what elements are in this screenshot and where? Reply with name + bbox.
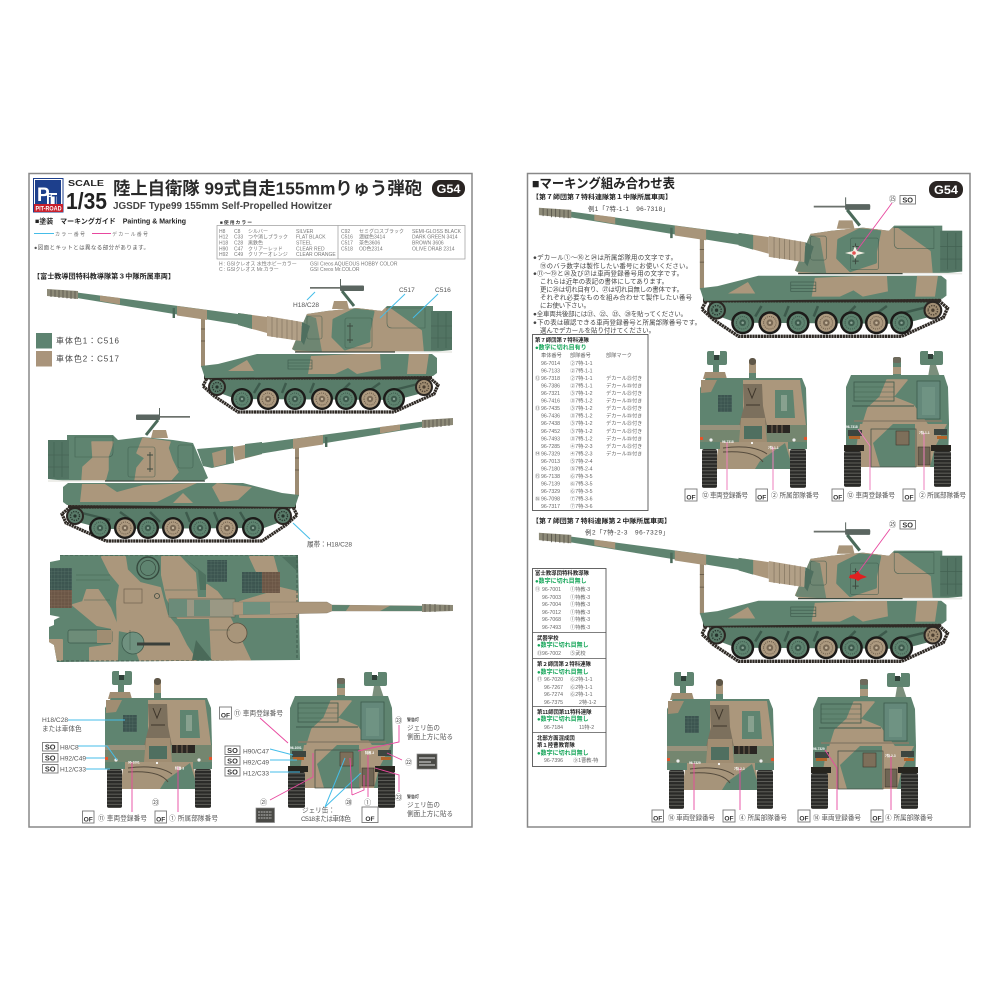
colour table: GSI Creos Mr.COLOR [310,267,360,273]
heading: painting and marking: ■塗装 マーキングガイド Painting & Marking [35,216,186,226]
table: 7th artillery regiment: ④7特-2-3 [570,442,593,450]
table: other units: 2特-1-2 [579,698,596,706]
table: other units: ⑪ [535,585,540,593]
logo: PIT-ROAD: P [37,185,50,206]
table: 7th artillery regiment: 96-7435 [541,406,560,412]
labels: example 2 views: 96-7329 [689,761,701,765]
table: 7th artillery regiment: ●数字に切れ目有り [535,344,587,352]
table: other units: 96-7068 [542,617,561,623]
labels: rear view: ① [364,798,371,807]
table: 7th artillery regiment: 96-7321 [541,391,560,397]
table: 7th artillery regiment: 96-7386 [541,384,560,390]
callout: SO marking example 2 [849,520,916,581]
colour table: C8 [234,229,241,235]
colour table: H92 [219,252,228,258]
colour table: STEEL [296,240,312,246]
table: other units: ⑬ [537,649,542,657]
colour table: つや消しブラック [248,234,288,241]
table: other units: 96-7002 [542,651,561,657]
notes: ⑲のバラ数字は製作したい番号にお使いください。 [540,261,692,270]
legend: line colours [34,231,148,238]
table: 7th artillery regiment: 96-7416 [541,399,560,405]
labels: rear view: 特教-3 [365,750,374,755]
table: other units: ●数字に切れ目無し [537,715,589,723]
colour table: C516 [341,235,353,241]
labels: example 1 views: OF [833,494,842,502]
colour table: C49 [234,252,243,258]
table: other units: 第１陸曹教育隊 [537,741,575,749]
labels: example 2 views: ⑭ 車両登録番号 [668,813,715,822]
table: 7th artillery regiment: ②7特-1-1 [570,366,593,374]
labels: rear view: ジェリ缶： [302,806,335,814]
table: other units: ●数字に切れ目無し [535,577,587,585]
badge: G54 [929,181,963,198]
table: 7th artillery regiment: 96-7317 [541,504,560,510]
colour table: 茶色3606 [359,240,380,246]
table: other units: ⑥2特-1-1 [570,683,593,691]
labels: rear view: OF [221,712,230,720]
labels: example 2 views: ④ 所属部隊番号 [885,813,933,822]
labels: example 1 views: 96-7318 [846,425,858,429]
callout: SO marking example 2: ㉕ [889,520,896,529]
colour table: OLIVE DRAB 2314 [412,246,455,252]
labels: example 2 views: 7特-2-3 [885,753,896,758]
table: other units: ①特教-3 [570,585,590,593]
callout: SO marking example 1 [845,194,916,259]
colour table: セミグロスブラック [359,228,404,235]
badge: G54: G54 [934,183,958,197]
table: other units: ①特教-3 [570,623,590,631]
table: other units: ⑨1曹教-特 [573,756,598,764]
vehicle: example 2 side view [539,522,962,661]
colour table: C518 [341,246,353,252]
callout: SO marking example 1: ㉕ [889,194,896,204]
labels: rear view: ジェリ缶の [407,800,440,809]
table: 7th artillery regiment: ⑥7特-3-5 [570,480,593,488]
vehicle: example 2 rear view [811,671,918,809]
labels: rear view: C518または車体色 [301,814,351,823]
vehicle: left side view [47,279,452,412]
table: 7th artillery regiment: 96-7139 [541,482,560,488]
table: other units: ①特教-3 [570,593,590,601]
table: other units: 96-7396 [544,758,563,764]
table: 7th artillery regiment: デカール㉕付き [606,434,642,442]
callouts: side view colours: H18/C28 [293,302,319,309]
labels: rear view: SO [227,768,238,776]
table: 7th artillery regiment: 96-7013 [541,459,560,465]
vehicle: front view [105,669,212,808]
table: other units: ●数字に切れ目無し [537,749,589,757]
labels: rear view: H90/C47 [243,748,269,756]
labels: rear view: ジェリ缶の [407,723,440,732]
section heading: Fuji school: 【富士教導団特科教導隊第３中隊所属車両】 [33,272,175,280]
colour table: FLAT BLACK [296,235,326,241]
panel: marking combination table [528,174,970,827]
table: other units: 96-7274 [544,692,563,698]
table: other units: 11特-2 [579,723,594,731]
table: other units: 96-7020 [544,677,563,683]
table: other units: 武器学校 [537,634,559,642]
labels: example 2 views: ⑭ 車両登録番号 [813,813,861,822]
colour table: SILVER [296,229,314,235]
table: other units: 96-7267 [544,685,563,691]
vehicle: right side view [48,408,453,541]
labels: rear view: 側面上方に貼る [407,809,453,818]
labels: rear view: OF [365,816,375,823]
labels: front view: SO [45,742,56,752]
table: 7th artillery regiment: ②7特-1-1 [570,359,593,367]
colour table: H90 [219,246,228,252]
labels: front view: SO [45,764,56,774]
table: 7th artillery regiment: 96-7493 [541,436,560,442]
table: 7th artillery regiment: デカール㉕付き [606,389,642,397]
labels: front view: 特教-3 [175,766,184,770]
colour table: C517 [341,240,353,246]
labels: front view: OF [156,816,165,824]
labels: rear view: SO [227,746,238,755]
labels: example 2 views: OF [799,816,809,822]
labels: example 1 views: 96-7318 [722,440,734,444]
table: 7th artillery regiment: 96-7438 [541,421,560,427]
table: 7th artillery regiment: ③7特-1-2 [570,389,593,397]
table: 7th artillery regiment: ③7特-1-2 [570,434,593,442]
table: 7th artillery regiment: デカール㉕付き [606,397,642,405]
labels: rear view: 警告灯 [407,793,419,799]
table: 7th artillery regiment: デカール㉕付き [606,412,642,420]
table: 7th artillery regiment: ④7特-2-3 [570,449,593,457]
labels: example 1 views [685,425,966,502]
vehicle: example 1 front view [700,349,807,488]
table: 7th artillery regiment: ③7特-1-2 [570,404,593,412]
table: 7th artillery regiment: 車体番号 [541,351,562,359]
notes: 更に㉖は切れ目有り、㉗は切れ目無しの書体です。 [540,284,683,294]
note: differences: ●図面とキットとは異なる部分があります。 [34,244,149,252]
table: 7th artillery regiment: デカール㉕付き [606,382,642,390]
colour swatches [36,333,120,366]
callout: track colour [293,523,352,548]
scale label [66,178,107,214]
logo: PIT-ROAD: PIT-ROAD [36,206,62,212]
table: other units: 第11師団第11特科連隊 [537,708,592,716]
labels: rear view: 側面上方に貼る [407,732,453,741]
table: 7th artillery regiment: ②7特-1-1 [570,374,593,382]
callout: track colour: 履帯：H18/C28 [307,540,352,548]
badge: G54: G54 [436,182,461,196]
table: 7th artillery regiment: ⑬ [535,404,540,412]
labels: rear view: ㉘ [345,798,352,807]
table: 7th artillery regiment: デカール㉕付き [606,442,642,450]
labels: example 2 views: ④ 所属部隊番号 [739,813,787,822]
labels: rear view: ㉓ [395,716,402,725]
colour table [217,219,465,273]
example 2: 例2「7特-2-3 96-7329」 [585,528,669,536]
example 1: 例1「7特-1-1 96-7318」 [588,204,669,213]
table: other units: ⑤武校 [570,649,586,657]
vehicle: top view [40,550,453,665]
section heading: 2nd company: 【第７師団第７特科連隊第２中隊所属車両】 [532,516,671,525]
table: 7th artillery regiment: ③7特-1-2 [570,419,593,427]
colour table: C92 [341,229,350,235]
table: 7th artillery regiment: ⑯ [535,494,540,502]
colour swatches: 車体色1：C516 [56,336,120,346]
labels: front view: ㉓ [152,798,159,807]
callout: SO marking example 1: SO [902,196,913,204]
labels: example 1 views: ⑫ 車両登録番号 [847,490,895,500]
labels: rear view [220,707,453,823]
labels: front view: 96-1001 [128,760,140,764]
table: other units: 96-7012 [542,610,561,616]
table: 7th artillery regiment: ⑭ [535,449,540,457]
labels: example 2 views: OF [724,816,734,822]
table: other units: 富士教導団特科教導隊 [535,569,590,577]
table: other units: 第２師団第２特科連隊 [537,660,592,668]
colour table: 黒鉄色 [248,240,263,246]
table: 7th artillery regiment: ③7特-1-2 [570,412,593,420]
labels: example 1 views: ② 所属部隊番号 [771,490,819,500]
labels: front view: H92/C49 [60,756,86,762]
table: 7th artillery regiment: 96-7318 [541,376,560,382]
labels: front view: OF [84,816,93,824]
colour table: シルバー [248,229,268,235]
colour table: H18 [219,240,228,246]
colour table: BROWN 3606 [412,240,444,246]
table: 7th artillery regiment: 96-7098 [541,496,560,502]
table: 7th artillery regiment: 部隊番号 [570,351,591,359]
notes: ●全車両共後部には㉑、㉒、㉓、㉘を貼ってください。 [533,309,687,318]
table: 7th artillery regiment: 96-7285 [541,444,560,450]
labels: example 1 views: OF [904,494,914,502]
table: 7th artillery regiment: ⑫ [535,374,540,382]
colour table: C : GSIクレオス Mr.カラー [219,267,279,273]
table: 7th artillery regiment: ③7特-1-2 [570,397,593,405]
labels: example 2 views: OF [653,816,662,822]
table: 7th artillery regiment: ②7特-1-1 [570,382,593,390]
labels: example 1 views: 7特-1-1 [768,445,779,450]
table: 7th artillery regiment: ⑤7特-2-4 [570,464,593,472]
colour swatches: 車体色2：C517 [56,354,120,364]
notes [533,252,701,334]
colour table: SEMI-GLOSS BLACK [412,229,462,235]
labels: front view: SO [45,754,56,762]
scale label: SCALE [68,178,104,188]
colour table: 濃緑色3414 [359,234,385,241]
colour table: ■使用カラー [220,219,252,226]
labels: rear view: ㉒ [405,758,412,767]
labels: rear view: ⑪ 車両登録番号 [234,708,283,718]
colour table: H8 [219,229,226,235]
table: other units: 96-7001 [542,587,561,593]
table: other units: ⑥2特-1-1 [570,675,593,683]
labels: rear view: H92/C49 [243,760,269,766]
labels: front view: H18/C28 [42,717,68,724]
legend: line colours: デカール番号 [112,231,148,238]
labels: front view: ① 所属部隊番号 [169,814,218,822]
labels: example 2 views: OF [872,816,882,822]
table: other units: ⑥2特-1-1 [570,690,593,698]
labels: example 2 views: 7特-2-3 [734,766,745,771]
colour table: クリアーレッド [248,246,283,252]
callouts: side view colours: C517 [399,287,415,294]
logo: PIT-ROAD: iT [48,192,60,207]
table: 7th artillery regiment: 96-7436 [541,414,560,420]
colour table: GSI Creos AQUEOUS HOBBY COLOR [310,262,398,268]
labels: rear view: ㉑ [260,798,267,807]
vehicle: example 1 rear view [844,349,951,487]
table: 7th artillery regiment: ⑥7特-3-5 [570,472,593,480]
table: 7th artillery regiment: ③7特-1-2 [570,427,593,435]
colour table: H12 [219,235,228,241]
panel: painting and marking guide [29,174,472,827]
table: 7th artillery regiment: デカール㉕付き [606,419,642,427]
table: 7th artillery regiment: 第７師団第７特科連隊 [535,336,590,344]
table: other units: ①特教-3 [570,615,590,623]
labels: front view: H12/C33 [60,766,86,774]
table: other units: ①特教-3 [570,600,590,608]
table: other units: 96-7493 [542,625,561,631]
labels: front view: H8/C8 [60,744,79,752]
vehicle: rear view [288,670,395,808]
colour table: H : GSIクレオス 水性ホビーカラー [219,260,297,268]
table: other units: ●数字に切れ目無し [537,668,589,676]
labels: example 1 views: ② 所属部隊番号 [919,490,966,500]
table: other units: 96-7003 [542,595,561,601]
title: 陸上自衛隊 99式自走155mmりゅう弾砲 [113,178,422,198]
callouts: side view colours [293,287,451,318]
table: 7th artillery regiment: 96-7180 [541,466,560,472]
table: other units: 96-7004 [542,602,561,608]
table: other units: ①特教-3 [570,608,590,616]
labels: rear view: H12/C33 [243,770,269,778]
labels: example 1 views: OF [757,494,766,502]
labels: example 1 views: 7特-1-1 [919,430,930,435]
notes: 選んでデカールを貼り付けてください。 [540,326,655,334]
callouts: side view colours: C516 [435,287,451,294]
table: 7th artillery regiment: デカール㉕付き [606,427,642,435]
table: 7th artillery regiment: 96-7452 [541,429,560,435]
table: 7th artillery regiment: 96-7133 [541,368,560,374]
notes: ●下の表は確認できる車両登録番号と所属部隊番号です。 [533,318,701,326]
labels: rear view: ㉓ [395,793,402,802]
labels: rear view: 96-1001 [290,746,302,750]
heading: marking combinations: ■マーキング組み合わせ表 [532,176,675,191]
table: 7th artillery regiment: 96-7329 [541,451,560,457]
colour table: クリアーオレンジ [248,252,288,258]
table: other units: ●数字に切れ目無し [537,641,589,649]
labels: rear view: SO [227,756,238,766]
notes: にお使い下さい。 [540,300,590,310]
labels: example 1 views: OF [686,494,696,502]
callout: SO marking example 2: SO [902,520,913,530]
table: 7th artillery regiment: 96-7329 [541,489,560,495]
table: 7th artillery regiment: デカール㉕付き [606,449,642,457]
notes: ●デカール①～⑯と㉔は所属部隊用の文字です。 [533,252,677,262]
colour table: CLEAR ORANGE [296,252,336,258]
table: 7th artillery regiment: 96-7138 [541,474,560,480]
subtitle: JGSDF Type99 155mm Self-Propelled Howitzer [113,200,332,212]
table: 7th artillery regiment: 部隊マーク [606,351,632,359]
scale label: 1/35 [66,188,107,214]
table: 7th artillery regiment: デカール㉕付き [606,404,642,412]
table: 7th artillery regiment: ⑥7特-3-5 [570,487,593,495]
table: 7th artillery regiment: ⑮ [535,472,540,480]
labels: rear view: 警告灯 [407,716,419,722]
logo: PIT-ROAD [34,178,63,212]
table: other units: ⑰ [537,675,542,683]
table: other units: 96-7184 [544,725,563,731]
labels: front view [42,717,218,824]
notes: それぞれ必要なものを組み合わせて製作したい番号 [540,292,693,302]
table: 7th artillery regiment: ⑤7特-2-4 [570,457,593,465]
table: other units: 96-7375 [544,700,563,706]
legend: line colours: カラー番号 [55,231,85,238]
labels: example 2 views [652,747,933,822]
colour table: OD色2314 [359,245,383,252]
colour table: DARK GREEN 3414 [412,235,458,241]
labels: front view: または車体色 [42,724,82,733]
vehicle: example 2 front view [667,670,774,809]
table: other units: 北部方面混成団 [537,734,575,742]
labels: example 2 views: 96-7329 [813,747,825,751]
table: other units [532,568,606,766]
colour table: C47 [234,246,243,252]
table: 7th artillery regiment: ⑦7特-3-6 [570,502,593,510]
labels: front view: ⑪ 車両登録番号 [98,814,147,822]
table: 7th artillery regiment: デカール㉕付き [606,374,642,382]
labels: example 1 views: ⑫ 車両登録番号 [702,490,748,500]
colour table: CLEAR RED [296,246,325,252]
vehicle: example 1 side view [539,197,962,336]
notes: これらは近年の表記の書体にしてあります。 [540,276,668,286]
table: 7th artillery regiment [532,334,648,510]
colour table: C33 [234,235,243,241]
colour table: C28 [234,240,243,246]
table: 7th artillery regiment: 96-7014 [541,361,560,367]
section heading: 1st company: 【第７師団第７特科連隊第１中隊所属車両】 [532,192,672,201]
notes: ●⑪～⑲と㉖及び㉗は車両登録番号用の文字です。 [533,268,683,278]
badge: G54 [432,180,465,197]
table: 7th artillery regiment: ⑦7特-3-6 [570,494,593,502]
